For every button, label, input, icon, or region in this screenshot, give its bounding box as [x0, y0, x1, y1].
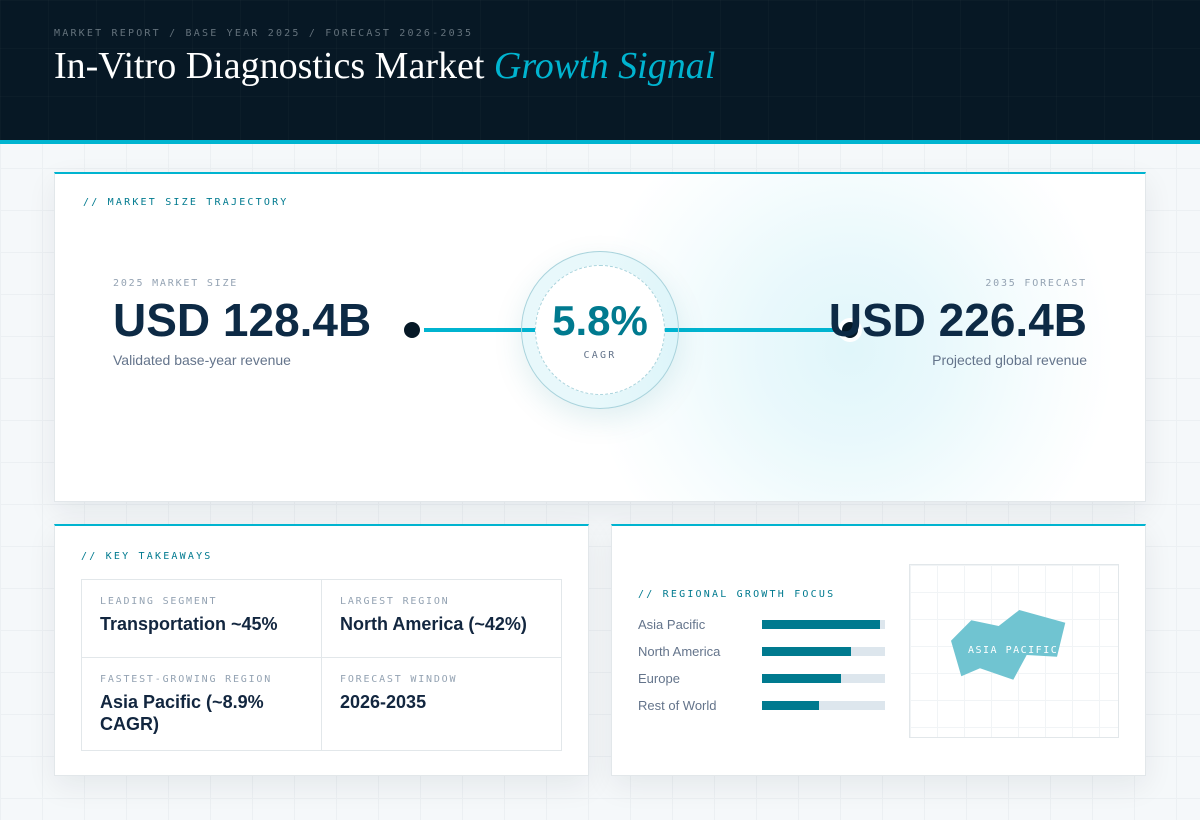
panel heading: // MARKET SIZE TRAJECTORY [83, 197, 289, 208]
inner dashed disc [535, 265, 665, 395]
cell value: Transportation ~45% [100, 614, 278, 634]
map panel [909, 564, 1119, 738]
bar: Asia Pacific [762, 620, 885, 629]
bar: Rest of World [762, 701, 885, 710]
cell caption: LEADING SEGMENT [100, 596, 217, 607]
region label: North America: North America [638, 644, 720, 659]
trajectory line right [664, 328, 844, 332]
panel: key takeaways [54, 524, 589, 776]
cell value: Asia Pacific (~8.9% CAGR) [100, 692, 264, 734]
cell: leading segment [100, 596, 278, 634]
cell value: North America (~42%) [340, 614, 527, 634]
forecast value: USD 226.4B [829, 294, 1087, 346]
cell caption: FASTEST-GROWING REGION [100, 674, 272, 685]
cell value: 2026-2035 [340, 692, 426, 712]
regional heading: // REGIONAL GROWTH FOCUS [638, 589, 835, 600]
base year value: USD 128.4B [113, 294, 371, 346]
forecast figure [829, 278, 1087, 368]
base year note: Validated base-year revenue [113, 352, 291, 368]
bar: North America [762, 647, 885, 656]
forecast caption: 2035 FORECAST [985, 278, 1087, 289]
cell caption: LARGEST REGION [340, 596, 450, 607]
start dot [400, 318, 424, 342]
horizontal divider [82, 657, 561, 658]
header band [0, 0, 1200, 144]
cell: forecast window [340, 674, 457, 712]
cell caption: FORECAST WINDOW [340, 674, 457, 685]
takeaways table [81, 579, 562, 751]
CAGR value: 5.8% [552, 297, 648, 344]
trajectory line left [424, 328, 536, 332]
forecast note: Projected global revenue [932, 352, 1087, 368]
region label: Asia Pacific: Asia Pacific [638, 617, 705, 632]
bar: Europe [762, 674, 885, 683]
title: In-Vitro Diagnostics Market Growth Signal [54, 45, 715, 87]
panel: regional growth focus [611, 524, 1146, 776]
cell: largest region [340, 596, 527, 634]
cell: fastest-growing region [100, 674, 272, 734]
report kicker: MARKET REPORT / BASE YEAR 2025 / FORECAST 2026-2035 [54, 28, 473, 39]
panel heading: // KEY TAKEAWAYS [81, 551, 213, 562]
vertical divider [321, 580, 322, 750]
region label: Rest of World: Rest of World [638, 698, 717, 713]
map label: ASIA PACIFIC [968, 645, 1058, 656]
map: Asia Pacific region [951, 610, 1066, 680]
base year figure [113, 278, 371, 368]
end dot [838, 318, 862, 342]
CAGR label: CAGR [584, 350, 616, 361]
region label: Europe: Europe [638, 671, 680, 686]
panel: market size trajectory [54, 172, 1146, 502]
base year caption: 2025 MARKET SIZE [113, 278, 238, 289]
CAGR badge [521, 251, 679, 409]
